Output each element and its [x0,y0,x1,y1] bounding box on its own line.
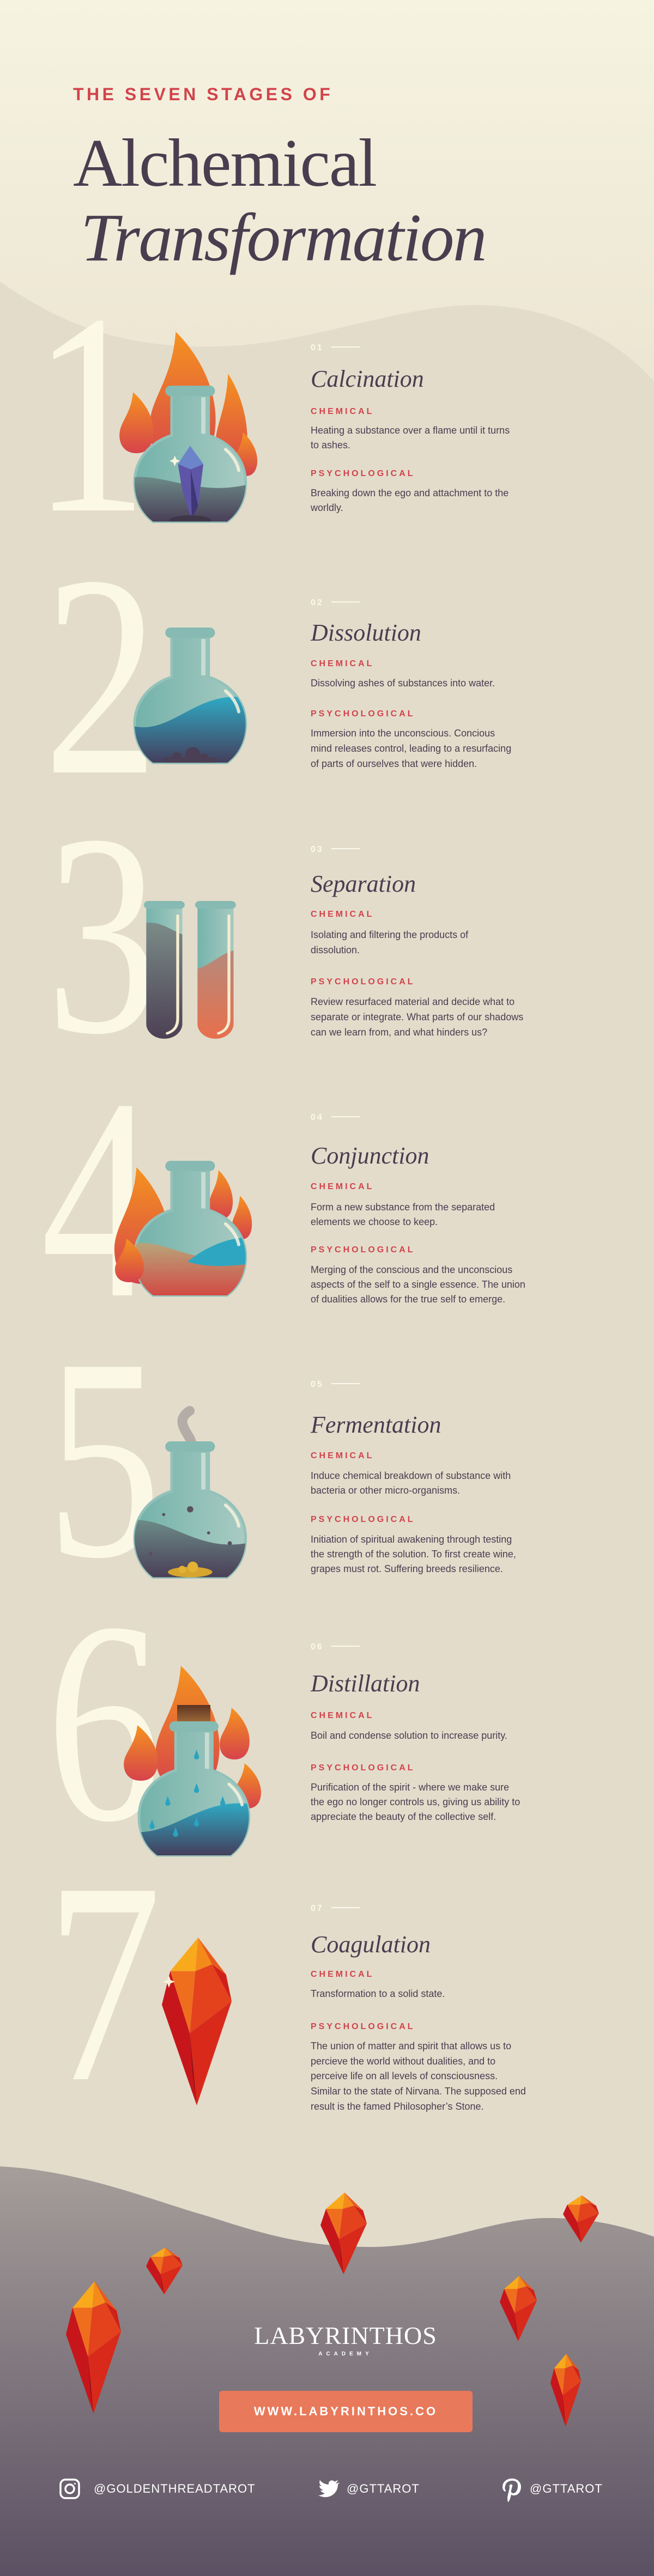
stage 06 text: Distillation: Boil and condense solution to increase purity. [311,1730,507,1741]
stage 04 text: Conjunction: Form a new substance from the separated [311,1202,495,1213]
stage 07 text: Coagulation: Transformation to a solid state. [311,1988,445,1999]
stage 01 text: Calcination: PSYCHOLOGICAL [311,469,415,478]
heading: the seven stages of: THE SEVEN STAGES OF [73,84,333,104]
stage 04 text: Conjunction: CHEMICAL [311,1182,374,1191]
stage 03 text: Separation: dissolution. [311,945,360,955]
icon: fermentation flask with smoke [135,1411,246,1578]
stage 03 text: Separation: Isolating and filtering the products of [311,929,468,940]
stage 06 text: Distillation: appreciate the beauty of the collective self. [311,1811,496,1822]
stage 05 text: Fermentation: the strength of the solution. To first create wine, [311,1549,516,1560]
stage 04 text: Conjunction: elements we choose to keep. [311,1216,438,1227]
social: pinterest handle: @GTTAROT [530,2482,603,2495]
big numeral 6: 6 [46,1563,161,1881]
stage 04 text: Conjunction: PSYCHOLOGICAL [311,1245,415,1254]
icon: distillation flask with cork and flames [124,1666,261,1855]
stage 01 text: Calcination: to ashes. [311,440,350,450]
stage 02 text: Dissolution: 02 [311,598,324,607]
stage 03 text: Separation: PSYCHOLOGICAL [311,977,415,986]
footer crystals [66,2193,599,2427]
stage 02 text: Dissolution [311,598,511,769]
stage 07 text: Coagulation: perceive life on all levels of consciousness. [311,2070,498,2081]
stage 03 text: Separation [311,845,523,1038]
stage 04 text: Conjunction [311,1113,525,1305]
stage 03 text: Separation: separate or integrate. What parts of our shadows [311,1012,523,1022]
stage 07 text: Coagulation: percieve the world without dualities, and to [311,2056,495,2067]
stage 02 text: Dissolution: Immersion into the unconscious. Concious [311,728,495,739]
stage 01 text: Calcination: Calcination [311,366,424,392]
stage 05 text: Fermentation: bacteria or other micro-organisms. [311,1485,460,1496]
stage 07 text: Coagulation: Coagulation [311,1931,431,1958]
stage 02 text: Dissolution: CHEMICAL [311,659,374,668]
stage 01 text: Calcination [311,343,510,513]
logo: Labyrinthos Academy: LABYRINTHOS [254,2322,437,2349]
button: website [219,2391,473,2432]
social: instagram handle: @GOLDENTHREADTAROT [94,2482,256,2495]
icon: conjunction flask with flames [114,1161,252,1295]
stage 07 text: Coagulation: PSYCHOLOGICAL [311,2022,415,2031]
icon: twitter [318,2480,340,2497]
stage 01 text: Calcination: CHEMICAL [311,407,374,416]
stage 01 text: Calcination: worldly. [311,502,343,513]
icon: coagulation red crystal [162,1938,232,2105]
stage 04 text: Conjunction: of dualities allows for the true self to emerge. [311,1294,505,1305]
icon: pinterest [502,2478,521,2502]
stage 04 text: Conjunction: aspects of the self to a single essence. The union [311,1279,525,1290]
stage 07 text: Coagulation: Similar to the state of Nirvana. The supposed end [311,2086,526,2097]
big numeral 1: 1 [33,255,148,573]
footer background wave [0,2166,654,2576]
stage 03 text: Separation: Separation [311,870,416,897]
big numeral 4: 4 [41,1040,156,1358]
icon: separation test tubes [144,901,236,1043]
stage 06 text: Distillation: Distillation [311,1670,420,1697]
icon: instagram [60,2480,79,2498]
social: twitter handle: @GTTAROT [347,2482,420,2495]
stage 01 text: Calcination: 01 [311,343,324,352]
icon: calcination flask with flames [119,332,257,526]
stage 05 text: Fermentation: Fermentation [311,1411,441,1438]
stage 06 text: Distillation: CHEMICAL [311,1711,374,1720]
stage 02 text: Dissolution: of parts of ourselves that were hidden. [311,758,477,769]
stage 01 text: Calcination: Heating a substance over a flame until it turns [311,425,510,436]
stage 03 text: Separation: Review resurfaced material and decide what to [311,996,514,1007]
stage 07 text: Coagulation: result is the famed Philosopher’s Stone. [311,2101,484,2112]
stage 01 text: Calcination: Breaking down the ego and attachment to the [311,488,508,498]
stage 06 text: Distillation: 06 [311,1642,324,1652]
logo: Labyrinthos Academy: ACADEMY [318,2351,373,2357]
stage 06 text: Distillation: the ego no longer controls us, giving us ability to [311,1796,520,1807]
stage 05 text: Fermentation [311,1380,516,1574]
stage 03 text: Separation: can we learn from, and what hinders us? [311,1027,487,1038]
stage 02 text: Dissolution: PSYCHOLOGICAL [311,709,415,718]
stage 06 text: Distillation: Purification of the spirit - where we make sure [311,1782,509,1793]
stage 07 text: Coagulation [311,1904,526,2112]
stage 05 text: Fermentation: grapes must rot. Suffering breeds resilience. [311,1563,503,1574]
stage 03 text: Separation: 03 [311,845,324,854]
stage 07 text: Coagulation: 07 [311,1904,324,1913]
stage 05 text: Fermentation: CHEMICAL [311,1451,374,1460]
stage 05 text: Fermentation: 05 [311,1380,324,1389]
stage 06 text: Distillation [311,1642,520,1822]
stage 05 text: Fermentation: Initiation of spiritual awakening through testing [311,1534,512,1545]
stage 04 text: Conjunction: Conjunction [311,1142,429,1169]
stage 04 text: Conjunction: 04 [311,1113,324,1122]
big numeral 7: 7 [46,1824,161,2142]
big numeral 3: 3 [46,776,159,1094]
button: website: WWW.LABYRINTHOS.CO [254,2404,438,2418]
icon: dissolution flask [135,628,246,764]
stage 07 text: Coagulation: The union of matter and spirit that allows us to [311,2041,511,2051]
stage 07 text: Coagulation: CHEMICAL [311,1970,374,1979]
stage 02 text: Dissolution: mind releases control, leading to a resurfacing [311,743,511,754]
stage 06 text: Distillation: PSYCHOLOGICAL [311,1763,415,1773]
stage 04 text: Conjunction: Merging of the conscious and the unconscious [311,1264,512,1275]
stage 05 text: Fermentation: Induce chemical breakdown of substance with [311,1470,511,1481]
title: Alchemical Transformation [73,126,486,276]
stage 02 text: Dissolution: Dissolving ashes of substances into water. [311,678,495,689]
stage 02 text: Dissolution: Dissolution [311,619,421,646]
stage 05 text: Fermentation: PSYCHOLOGICAL [311,1515,415,1524]
title: Alchemical Transformation: Alchemical [73,126,376,201]
title: Alchemical Transformation: Transformation [81,200,486,276]
big numeral 2: 2 [44,517,159,835]
stage 03 text: Separation: CHEMICAL [311,910,374,919]
big numeral 5: 5 [46,1300,161,1618]
